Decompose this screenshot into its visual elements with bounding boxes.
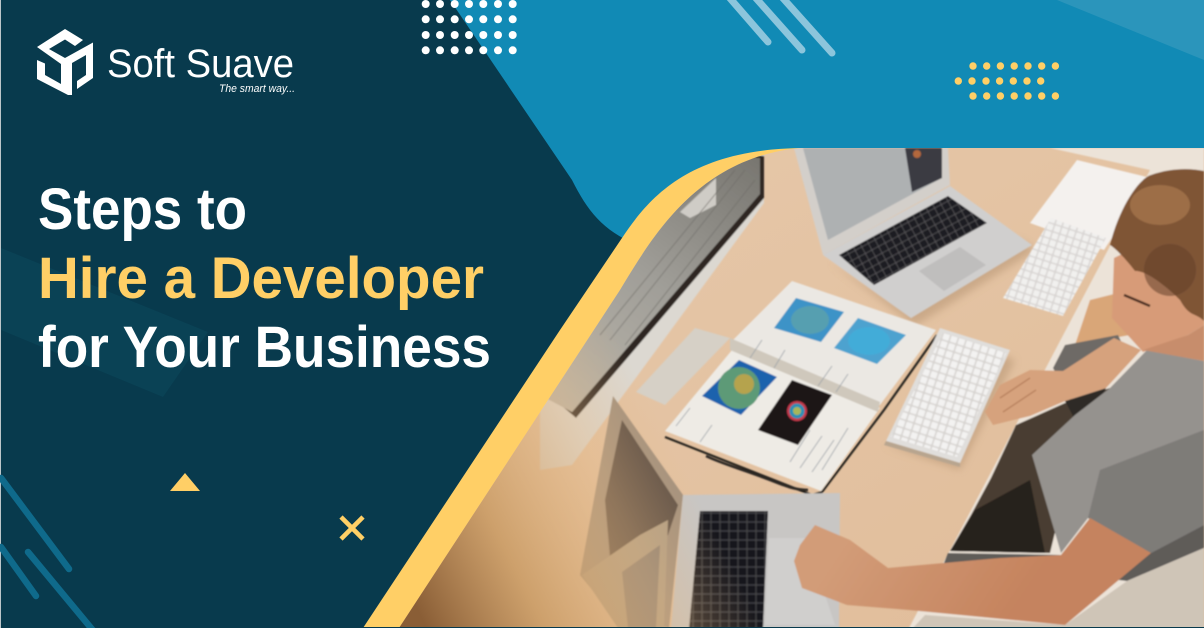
trousers [950, 388, 1110, 553]
tagline: The smart way... [219, 83, 295, 95]
chair upper [1052, 334, 1122, 372]
t-shirt [1032, 350, 1204, 553]
middle keyboard shadow [905, 356, 1014, 470]
monitor stand [636, 328, 730, 405]
open notebook top page [732, 281, 936, 405]
neck [1143, 325, 1204, 361]
top laptop trackpad [919, 247, 986, 291]
title line: for Your Business: for Your Business [38, 315, 491, 380]
monitor window reflection [680, 178, 716, 218]
hair highlight [1130, 185, 1190, 225]
notebook binding edge [665, 335, 937, 495]
notebook image: blue globe two [834, 318, 906, 364]
yellow swoosh band [363, 148, 1204, 628]
top laptop screen [803, 148, 942, 240]
finger shadows [1000, 378, 1036, 412]
monitor text lines [600, 184, 724, 345]
title line: Steps to: Steps to [38, 177, 247, 242]
notebook image: earth [702, 360, 777, 415]
arm right and hand on keyboard [985, 338, 1141, 425]
top right white keyboard [1003, 218, 1106, 316]
decoration: lower-left diagonal stripes [1, 478, 96, 628]
notebook image: black panel [758, 380, 832, 445]
arm lower and hand on trackpad [794, 518, 1151, 625]
icon: yellow triangle [170, 473, 200, 491]
title [38, 177, 491, 380]
icon: yellow cross [341, 517, 363, 539]
lighter blue corner facet [1057, 0, 1204, 60]
seat beige [913, 548, 1204, 628]
top laptop shadow [854, 246, 1032, 324]
window and floor behind desk [909, 148, 1204, 628]
monitor screen [540, 150, 760, 412]
top laptop base [823, 186, 1032, 318]
decoration: yellow dot grid [955, 62, 1059, 100]
bottom laptop keyboard [689, 511, 768, 628]
notebook handwriting [676, 340, 848, 472]
brow [1124, 295, 1150, 306]
hair shadow [1144, 244, 1196, 296]
icon: logo cube [37, 29, 93, 95]
monitor silver frame [540, 150, 764, 470]
decoration: pale diagonal stripes [728, 0, 832, 53]
desk surface [380, 140, 1204, 628]
face [1112, 240, 1204, 352]
warm tint across lower-left of photo [380, 140, 1204, 628]
paper on desk [1030, 160, 1151, 250]
title line: Hire a Developer: Hire a Developer [38, 246, 484, 311]
wordmark: Soft Suave [107, 42, 294, 86]
bottom laptop trackpad [765, 538, 835, 625]
open notebook lower page [665, 350, 880, 491]
photo: developer at desk [380, 140, 1204, 628]
logo: Soft Suave [37, 29, 295, 95]
hair [1110, 169, 1204, 321]
faint angular shape behind title [1, 248, 208, 397]
decoration: white dot grid [422, 0, 517, 54]
middle white keyboard [886, 328, 1010, 463]
notebook image: blue globe one [774, 298, 844, 342]
bottom laptop hinge screen glass [580, 396, 683, 628]
notebook elastic strap [706, 456, 808, 490]
bottom laptop base [671, 493, 840, 628]
panel: blue header shape [450, 0, 1204, 246]
chair lower [942, 523, 1204, 581]
top laptop keyboard [839, 196, 987, 285]
top laptop screen frame [794, 148, 950, 255]
monitor black border [555, 150, 764, 418]
bottom edge line [363, 627, 1204, 628]
notebook spine shadow [730, 338, 880, 412]
dark gap under arm [1065, 388, 1106, 420]
